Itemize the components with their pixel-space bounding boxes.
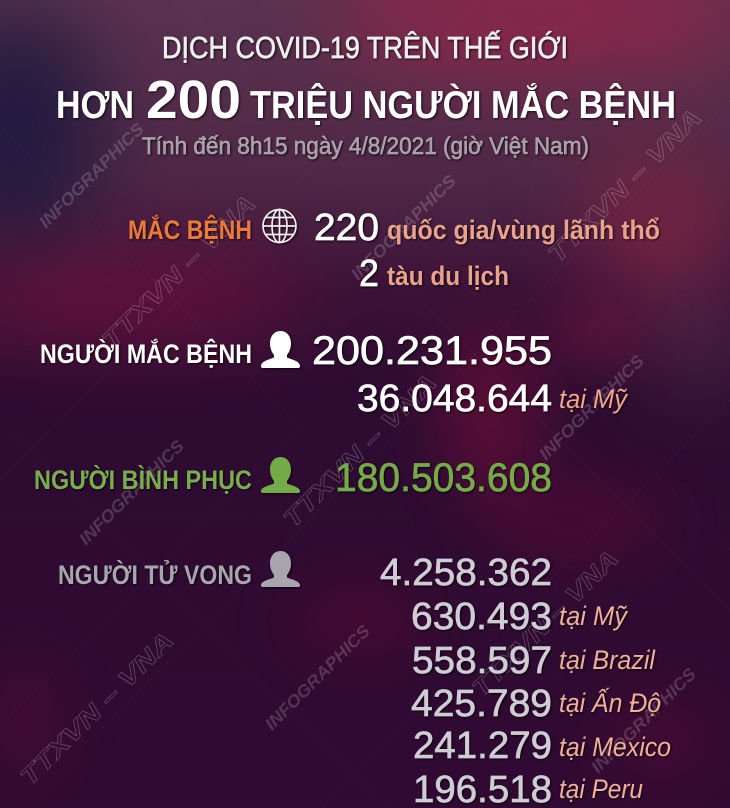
title line 1: DỊCH COVID-19 TRÊN THẾ GIỚI xyxy=(162,30,568,65)
row: Mexico deaths: tại Mexico xyxy=(559,732,671,762)
section: deaths xyxy=(58,551,671,808)
section: recovered xyxy=(34,456,552,500)
row: US deaths xyxy=(411,596,628,638)
watermarks: INFOGRAPHICS xyxy=(535,351,648,464)
label: người mắc bệnh: NGƯỜI MẮC BỆNH xyxy=(40,338,252,369)
icon: globe xyxy=(263,210,296,242)
watermarks: INFOGRAPHICS xyxy=(347,171,460,284)
label: người tử vong: NGƯỜI TỬ VONG xyxy=(58,558,252,590)
row: Peru deaths: tại Peru xyxy=(559,774,643,804)
watermarks: TTXVN – VNA xyxy=(97,190,261,354)
watermarks: INFOGRAPHICS xyxy=(35,119,148,232)
row: Brazil deaths: tại Brazil xyxy=(559,645,656,675)
watermarks: INFOGRAPHICS xyxy=(75,436,188,549)
row: Peru deaths xyxy=(413,769,643,808)
watermarks: INFOGRAPHICS xyxy=(587,664,700,777)
date subtitle: Tính đến 8h15 ngày 4/8/2021 (giờ Việt Nam) xyxy=(142,133,589,160)
stat: 220 territories xyxy=(314,207,660,249)
row: Brazil deaths: 558.597 xyxy=(412,640,552,682)
title line 2: TRIỆU NGƯỜI MẮC BỆNH xyxy=(250,83,676,127)
stat: infected in US: tại Mỹ xyxy=(559,384,628,414)
section: affected territories xyxy=(128,207,660,295)
title block xyxy=(56,30,676,160)
title line 2: 200 xyxy=(146,70,241,130)
stat: 2 cruise ships xyxy=(359,253,509,295)
stat: 220 territories: quốc gia/vùng lãnh thổ xyxy=(387,215,660,245)
row: Mexico deaths xyxy=(413,725,671,767)
title line 2 xyxy=(56,70,676,130)
row: US deaths: 630.493 xyxy=(411,596,552,638)
row: India deaths xyxy=(411,683,661,725)
watermarks: TTXVN – VNA xyxy=(543,104,707,268)
row: Mexico deaths: 241.279 xyxy=(413,725,552,767)
label: người bình phục: NGƯỜI BÌNH PHỤC xyxy=(34,464,252,495)
watermarks: TTXVN – VNA xyxy=(15,627,179,791)
row: Brazil deaths xyxy=(412,640,656,682)
section: infected xyxy=(40,329,628,420)
title line 2: HƠN xyxy=(56,84,134,127)
icon: person white xyxy=(261,331,300,368)
row: US deaths: tại Mỹ xyxy=(559,601,628,631)
stat: recovered: 180.503.608 xyxy=(335,456,552,500)
watermarks: TTXVN – VNA xyxy=(278,369,442,533)
row: India deaths: tại Ấn Độ xyxy=(559,687,661,718)
watermarks: INFOGRAPHICS xyxy=(261,621,374,734)
watermarks: TTXVN – VNA xyxy=(467,545,624,702)
stat: infected in US: 36.048.644 xyxy=(357,378,552,420)
stat: 2 cruise ships: 2 xyxy=(359,253,379,295)
stat: 220 territories: 220 xyxy=(314,207,379,249)
row: India deaths: 425.789 xyxy=(411,683,552,725)
stat: global deaths: 4.258.362 xyxy=(380,552,552,594)
icon: person green xyxy=(261,457,300,493)
label: mắc bệnh: MẮC BỆNH xyxy=(128,214,252,245)
stat: global infected: 200.231.955 xyxy=(312,329,552,373)
stat: 2 cruise ships: tàu du lịch xyxy=(387,261,509,291)
icon: person grey xyxy=(261,551,300,587)
